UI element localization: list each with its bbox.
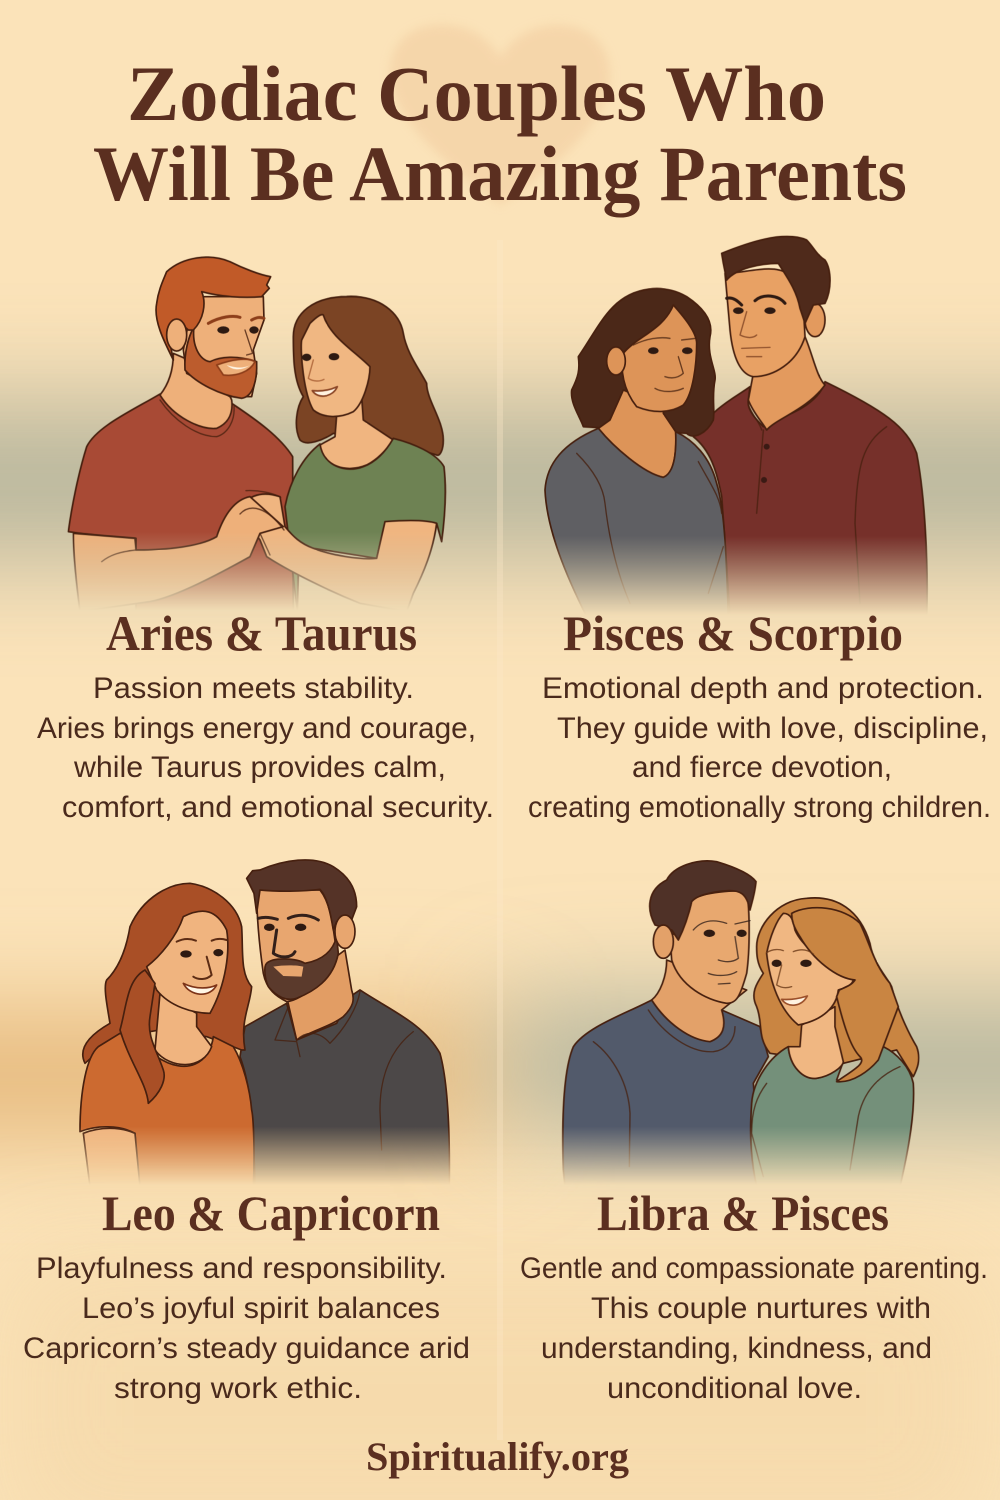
heading: Pisces & Scorpio (563, 605, 903, 661)
description: creating emotionally strong children. (528, 791, 991, 824)
man: blue sweater (563, 1000, 768, 1187)
panel text: Libra and Pisces (520, 1185, 988, 1405)
man: brows and nose (258, 915, 318, 957)
description: Playfulness and responsibility. (36, 1252, 447, 1285)
man: brows (727, 296, 785, 305)
description (37, 672, 494, 824)
man: ear (335, 915, 355, 948)
description: Leo’s joyful spirit balances (82, 1292, 440, 1325)
description (520, 1252, 988, 1405)
woman: hair (571, 289, 715, 436)
title (93, 50, 907, 217)
man: red shirt (68, 394, 293, 612)
woman: green shirt (285, 438, 445, 612)
description: Emotional depth and protection. (542, 672, 984, 705)
woman: eyes (772, 960, 812, 967)
woman: brows, nose and mouth (633, 338, 696, 391)
man: brows, nose and mouth (693, 921, 750, 984)
woman: front hair lock (120, 970, 164, 1103)
woman: green sweater (751, 1047, 914, 1187)
man: arm and hand (73, 497, 283, 612)
man: ear (167, 319, 187, 351)
woman: neck (598, 390, 676, 477)
man: neck (652, 960, 747, 1042)
man: face (183, 297, 264, 397)
woman: face (622, 305, 697, 411)
illustration: Libra and Pisces couple (563, 861, 919, 1187)
woman: grey sweater (545, 428, 728, 617)
man: eyes (733, 307, 776, 314)
man: mouth (217, 359, 255, 375)
man: face (725, 269, 805, 377)
man: nose (245, 330, 253, 355)
man: collar and sleeve lines (275, 992, 413, 1150)
man: neck (283, 950, 353, 1040)
clasped fingers (102, 491, 284, 562)
description: Aries brings energy and courage, (37, 712, 476, 745)
woman: eyes (180, 949, 223, 958)
description: while Taurus provides calm, (73, 751, 446, 784)
description: comfort, and emotional security. (62, 791, 494, 824)
woman: neck (320, 397, 393, 468)
description (528, 672, 991, 824)
man: nose and mouth (740, 312, 770, 357)
man: beard (185, 327, 257, 398)
woman: eyes (648, 347, 693, 354)
man: mouth area (273, 965, 303, 977)
description: This couple nurtures with (591, 1292, 931, 1325)
man: ear (805, 303, 825, 337)
woman: hair back (293, 297, 443, 455)
woman: smile (312, 387, 337, 396)
man: collar and sleeve lines (593, 1010, 735, 1167)
woman: orange top (80, 1033, 254, 1187)
description: Passion meets stability. (93, 672, 414, 705)
panel text: Aries and Taurus (37, 605, 494, 824)
woman: arm (240, 494, 437, 612)
heading: Leo & Capricorn (102, 1185, 440, 1241)
man: hair (722, 236, 830, 323)
man: eyes (217, 326, 259, 334)
panel text: Pisces and Scorpio (528, 605, 991, 824)
woman: ear (607, 347, 625, 375)
description: unconditional love. (607, 1372, 862, 1405)
man: eyes (264, 924, 306, 931)
woman: face (301, 315, 370, 416)
woman: eyes (302, 353, 339, 361)
man: dark shirt (240, 990, 449, 1187)
title: Will Be Amazing Parents (93, 130, 907, 217)
description: and fierce devotion, (632, 751, 892, 784)
woman: mouth (782, 996, 807, 1005)
illustration: Leo and Capricorn couple (80, 860, 449, 1187)
woman: arm (83, 1128, 140, 1187)
man: hair (247, 860, 357, 930)
man: henley details (748, 405, 887, 603)
man: face (670, 891, 749, 1003)
description: understanding, kindness, and (541, 1332, 932, 1365)
man: neck (160, 353, 232, 428)
woman: sweater lines (577, 453, 723, 603)
man: buttons (761, 444, 770, 483)
faint heart behind title (390, 25, 610, 205)
description (23, 1252, 470, 1405)
woman: neck (788, 1007, 843, 1078)
woman: smile (183, 983, 217, 994)
man: beard (265, 937, 338, 999)
man: hair (650, 861, 756, 940)
woman: brows and nose (177, 939, 227, 979)
woman: neck (155, 993, 212, 1065)
woman: face (767, 913, 853, 1025)
man: ear (653, 925, 673, 958)
woman: hair back (83, 883, 252, 1063)
illustration: Pisces and Scorpio couple (545, 236, 927, 617)
man: maroon henley (693, 382, 927, 617)
description: Capricorn’s steady guidance arid (23, 1332, 470, 1365)
description: strong work ethic. (114, 1372, 362, 1405)
footer website: Spiritualify.org (366, 1434, 629, 1479)
man: eyes (704, 930, 747, 937)
woman: nose (308, 360, 324, 381)
man: teeth (227, 365, 250, 369)
woman: face (147, 911, 228, 1013)
woman: hair (754, 898, 919, 1077)
heading: Libra & Pisces (597, 1185, 889, 1241)
man: brows (208, 316, 264, 323)
title: Zodiac Couples Who (127, 50, 826, 137)
man: neck (748, 337, 825, 430)
man: face (257, 890, 337, 1002)
heading: Aries & Taurus (106, 605, 417, 661)
description: They guide with love, discipline, (557, 712, 988, 745)
man: hair (156, 257, 271, 360)
woman: front hair (792, 908, 898, 1082)
woman: brows and nose (767, 950, 813, 988)
illustration: Aries and Taurus couple (68, 257, 445, 612)
panel text: Leo and Capricorn (23, 1185, 470, 1405)
man: shirt collar line (160, 400, 234, 437)
woman: sweater lines (752, 1067, 900, 1177)
